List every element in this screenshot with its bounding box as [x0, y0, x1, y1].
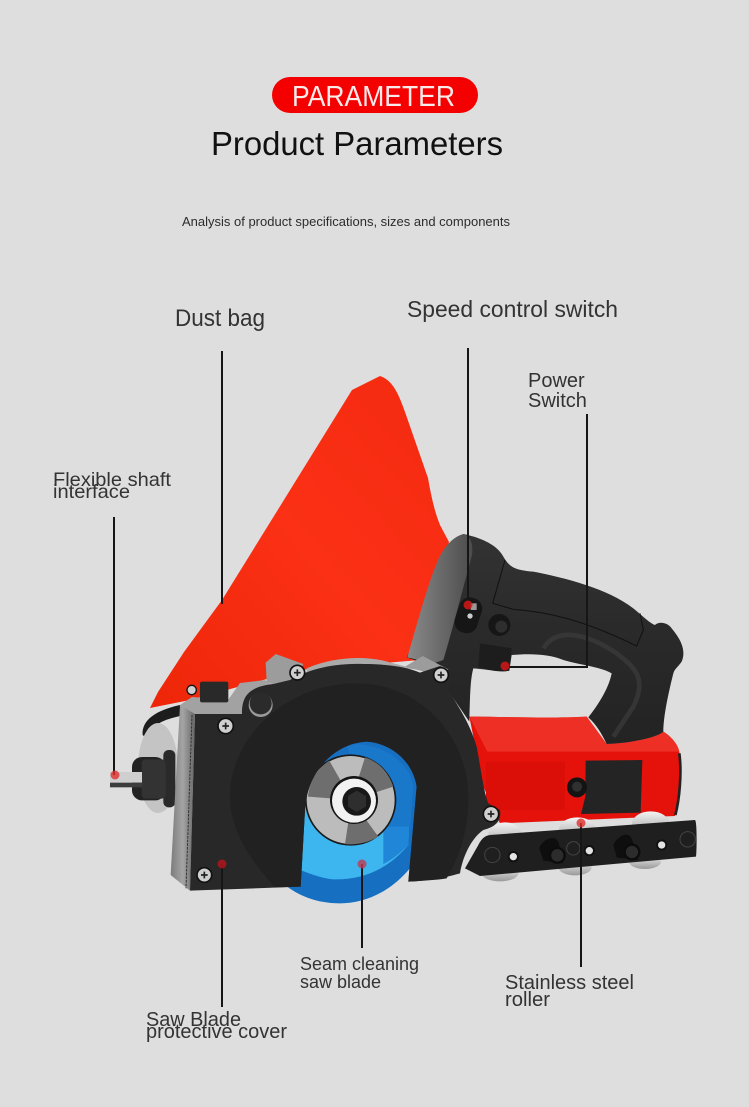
- front gray panel: [407, 534, 472, 663]
- small bolt: [187, 685, 196, 695]
- cover inner disc: [230, 683, 468, 887]
- blade flange: [305, 754, 396, 846]
- latch: [200, 682, 228, 702]
- label: flexible shaft interface: Flexible shaft: [53, 469, 172, 491]
- product illustration: tile seam saw: [110, 376, 697, 903]
- grip panel seam: [493, 560, 643, 646]
- badge: PARAMETER: PARAMETER: [292, 81, 455, 113]
- protective cover: [190, 664, 500, 891]
- leader lines: [114, 348, 587, 1007]
- screws: [197, 665, 499, 882]
- power trigger: [478, 643, 512, 671]
- label: stainless steel roller: [505, 972, 634, 1011]
- speed dial: [452, 595, 485, 636]
- subtitle: Analysis of product specifications, sizes and components: [182, 215, 510, 229]
- title: Product Parameters: [211, 125, 503, 162]
- label: dust bag: Dust bag: [175, 305, 265, 332]
- grip highlight: [543, 635, 639, 737]
- left metal bracket: [180, 680, 272, 714]
- side plate on motor: [581, 760, 642, 814]
- label: saw blade protective cover: protective cover: [146, 1021, 287, 1043]
- motor screw: [567, 777, 587, 797]
- label: speed control switch: Speed control switch: [407, 296, 618, 322]
- top rim: [307, 658, 417, 675]
- label: seam cleaning saw blade: Seam cleaning: [300, 954, 419, 974]
- rear plate edge: [675, 753, 680, 815]
- top left lobe: [266, 654, 303, 692]
- header: [182, 77, 510, 229]
- screw slots: [201, 669, 494, 878]
- label: power switch: [528, 370, 587, 412]
- rail holes and bolts: [485, 832, 695, 863]
- flexible shaft nut and shaft: [110, 750, 175, 807]
- grip body: [407, 534, 683, 744]
- dust bag: [150, 376, 449, 708]
- label: seam cleaning saw blade: [300, 954, 419, 992]
- top right lobe: [405, 656, 448, 675]
- label: stainless steel roller: roller: [505, 989, 550, 1011]
- roller wheels: [482, 811, 669, 881]
- label: stainless steel roller: Stainless steel: [505, 972, 634, 994]
- knob: [488, 614, 510, 636]
- motor top highlight: [469, 717, 679, 752]
- motor label recess: [486, 762, 565, 810]
- saw blade and cover: [110, 654, 500, 903]
- label: power switch: Switch: [528, 390, 587, 412]
- label: seam cleaning saw blade: saw blade: [300, 972, 381, 992]
- saw blade: [273, 740, 433, 903]
- label: flexible shaft interface: interface: [53, 481, 130, 503]
- side of gear plate: [171, 705, 195, 891]
- port: [249, 692, 273, 717]
- rear gear disc: [138, 723, 178, 813]
- callout dots: [110, 600, 586, 868]
- handle and motor: [407, 534, 697, 881]
- label: power switch: Power: [528, 370, 585, 392]
- motor housing: [469, 717, 681, 823]
- label: saw blade protective cover: Saw Blade: [146, 1009, 241, 1031]
- label: saw blade protective cover: [146, 1009, 287, 1043]
- label: flexible shaft interface: [53, 469, 172, 503]
- roller rail: [465, 820, 697, 876]
- bag collar: [143, 705, 180, 738]
- plate side groove: [186, 715, 192, 888]
